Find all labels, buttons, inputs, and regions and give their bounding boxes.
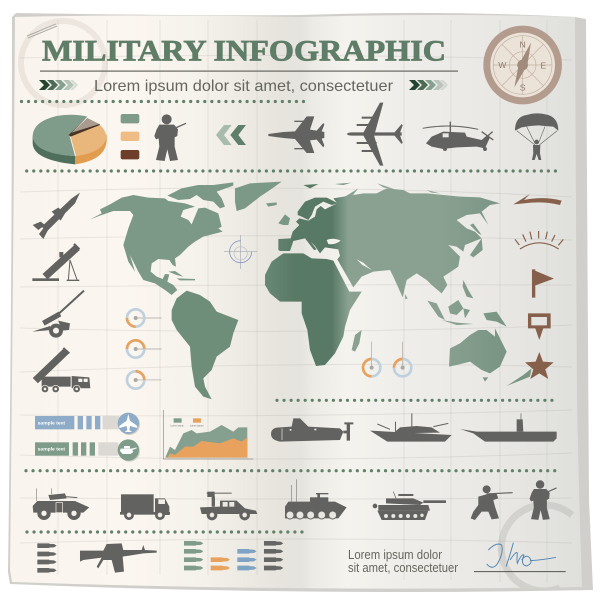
footer text: sit amet, consectetuer [348, 561, 458, 575]
chevrons left [39, 80, 78, 90]
icon: kneeling soldier [471, 485, 513, 520]
icon: helicopter [423, 122, 493, 151]
compass letters: S [520, 83, 526, 93]
icon: bomber [347, 103, 403, 166]
icon: mortar [32, 244, 79, 281]
sample bar: tank: sample text [38, 447, 65, 453]
eastern hemisphere [265, 183, 532, 386]
scandinavia [298, 198, 338, 220]
islands of asia and oceania [303, 183, 507, 352]
icon: howitzer [32, 291, 84, 338]
paper clip mark [27, 24, 57, 38]
south america [172, 291, 238, 399]
greenland [235, 182, 282, 211]
sample bar: aircraft [35, 413, 140, 435]
compass letters [498, 40, 546, 93]
area chart [163, 410, 253, 459]
icon: star [525, 352, 554, 379]
area chart: Lorem ipsum [190, 424, 203, 427]
crosshair [224, 235, 257, 269]
dotted dividers [22, 102, 561, 532]
compass letters: E [540, 61, 546, 71]
icon: amphibious vehicle [285, 479, 347, 519]
pie legend [121, 114, 139, 159]
icon: assault rifle [80, 543, 157, 573]
footer text: Lorem ipsum dolor [348, 548, 442, 562]
icon: parachutist [515, 113, 558, 160]
icon: rocket launcher truck [35, 348, 90, 393]
title: MILITARY INFOGRAPHIC [42, 34, 446, 68]
eurasia [278, 188, 500, 297]
sample bar: tank [35, 439, 140, 462]
compass needle [514, 43, 531, 87]
footer text [348, 548, 458, 575]
signature [474, 543, 566, 572]
subtitle: Lorem ipsum dolor sit amet, consectetuer [94, 78, 394, 95]
bullets: colored columns [184, 541, 283, 570]
world map [90, 182, 532, 399]
icon: truck [120, 494, 170, 520]
brown icons [513, 194, 563, 379]
chevrons right [409, 80, 448, 90]
caribbean [168, 271, 195, 280]
icon: aircraft carrier [460, 413, 557, 442]
north america [90, 195, 223, 295]
icon: gauge arc [515, 231, 563, 249]
compass [483, 26, 562, 104]
title rule [40, 70, 458, 72]
icon: arrow [513, 194, 562, 205]
bullets: left column [37, 543, 57, 573]
pie chart [33, 115, 107, 164]
icon: submarine [271, 418, 353, 442]
icon: tank [373, 492, 446, 520]
australia [449, 328, 532, 386]
africa [265, 253, 362, 366]
inland seas [327, 239, 372, 270]
donut charts bottom [363, 342, 411, 376]
icon: standing soldier [530, 480, 557, 520]
icon: fighter jet [268, 116, 324, 153]
icon: armed pickup [200, 492, 257, 520]
uk [278, 214, 290, 225]
sample bar: aircraft: sample text [38, 420, 65, 426]
donut charts left [127, 309, 162, 389]
compass letters: N [520, 40, 526, 50]
icon: map pin [528, 313, 551, 340]
arctic islands [167, 182, 233, 208]
icon: double chevron [216, 125, 246, 145]
icon: missile [33, 193, 80, 239]
area chart: Lorem ipsum [170, 424, 184, 427]
compass letters: W [498, 60, 507, 70]
icon: soldier [154, 114, 186, 161]
icon: armored car [33, 488, 89, 520]
icon: flag [532, 269, 554, 298]
icon: warship [370, 413, 452, 442]
